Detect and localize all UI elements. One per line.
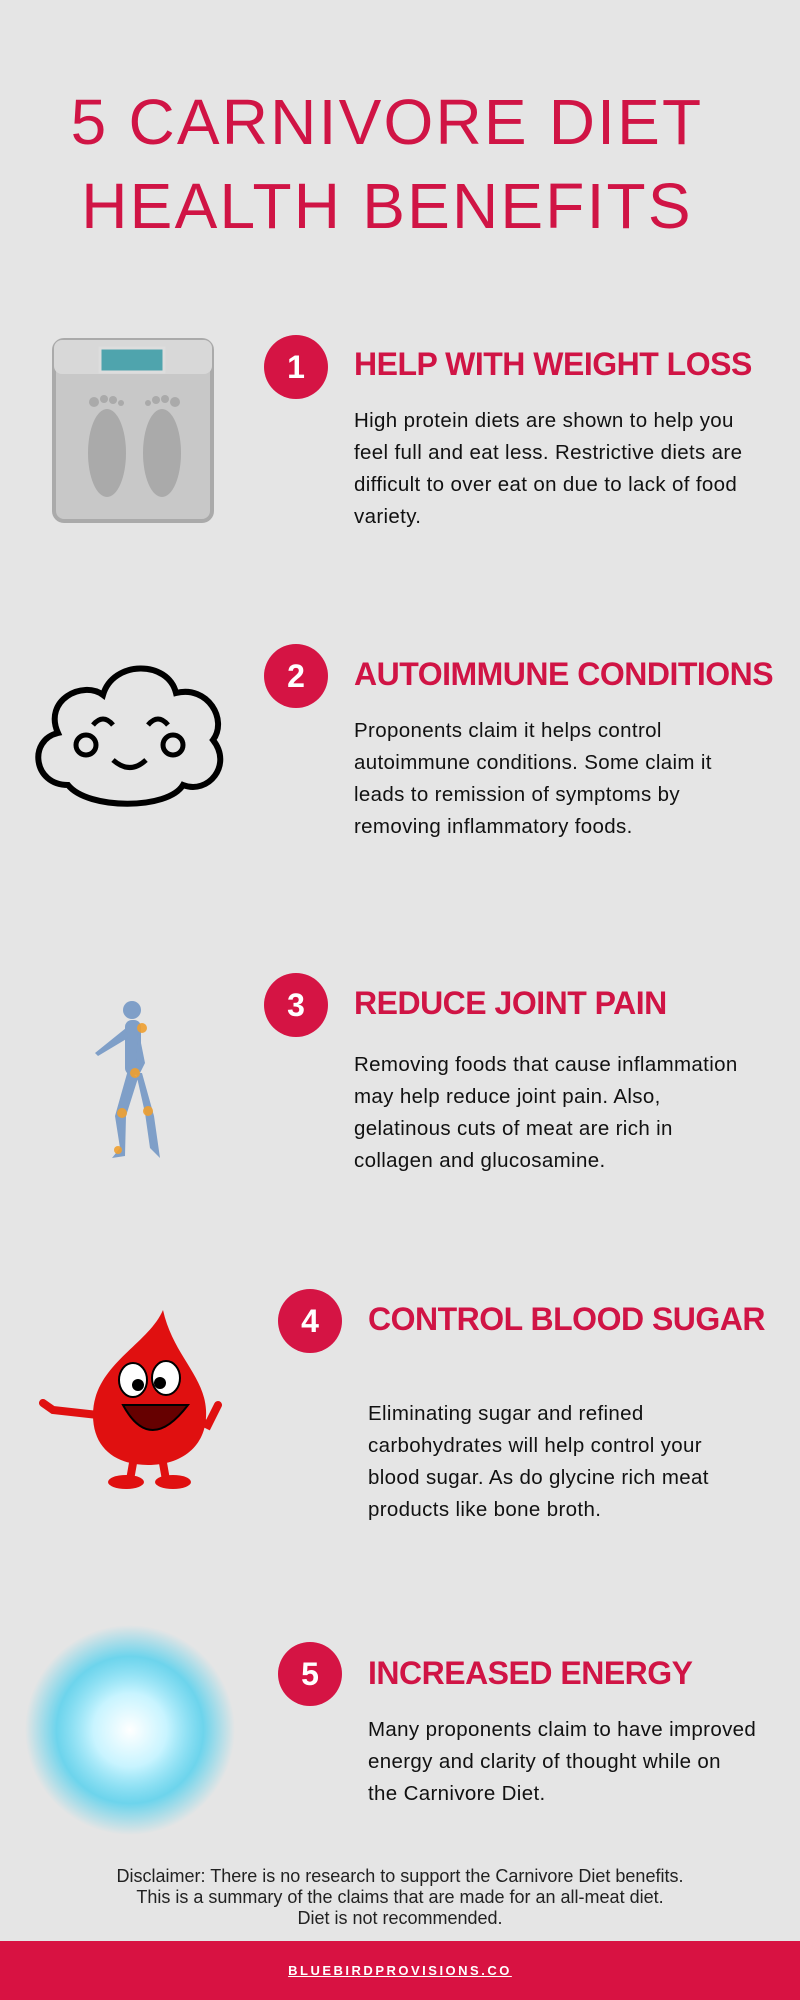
body text: variety. <box>354 505 421 528</box>
number 2 <box>264 644 328 708</box>
footer: BLUEBIRDPROVISIONS.CO <box>288 1963 512 1978</box>
body text: leads to remission of symptoms by <box>354 783 680 806</box>
number 3: 3 <box>287 987 305 1023</box>
panel: autoimmune <box>35 644 773 838</box>
body text: difficult to over eat on due to lack of food <box>354 473 737 496</box>
heading: AUTOIMMUNE CONDITIONS <box>354 656 773 692</box>
body text: gelatinous cuts of meat are rich in <box>354 1117 673 1140</box>
number 5 <box>278 1642 342 1706</box>
disclaimer <box>117 1866 683 1928</box>
body text: collagen and glucosamine. <box>354 1149 606 1172</box>
number 5: 5 <box>301 1656 319 1692</box>
icon: scale <box>52 338 214 523</box>
body text: carbohydrates will help control your <box>368 1434 702 1457</box>
number 4 <box>278 1289 342 1353</box>
panel: energy <box>27 1627 756 1833</box>
body text <box>368 1402 709 1521</box>
body text: may help reduce joint pain. Also, <box>354 1085 661 1108</box>
heading: HELP WITH WEIGHT LOSS <box>354 346 752 382</box>
number 1: 1 <box>287 349 305 385</box>
body text: Removing foods that cause inflammation <box>354 1053 738 1076</box>
body text: blood sugar. As do glycine rich meat <box>368 1466 709 1489</box>
disclaimer: This is a summary of the claims that are made for an all-meat diet. <box>136 1887 664 1907</box>
body text <box>368 1718 756 1805</box>
body text <box>354 719 712 838</box>
body text: Eliminating sugar and refined <box>368 1402 644 1425</box>
body text: feel full and eat less. Restrictive diets are <box>354 441 742 464</box>
number 4: 4 <box>301 1303 319 1339</box>
panel: weight loss <box>52 335 752 528</box>
number 2: 2 <box>287 658 305 694</box>
body text: removing inflammatory foods. <box>354 815 633 838</box>
body text: Proponents claim it helps control <box>354 719 662 742</box>
heading: INCREASED ENERGY <box>368 1655 692 1691</box>
number 1 <box>264 335 328 399</box>
body text: products like bone broth. <box>368 1498 601 1521</box>
icon: human figure <box>95 1001 160 1158</box>
body text: the Carnivore Diet. <box>368 1782 546 1805</box>
panel: joint pain <box>95 973 738 1172</box>
heading: CONTROL BLOOD SUGAR <box>368 1301 765 1337</box>
title: HEALTH BENEFITS <box>81 170 693 242</box>
body text: Many proponents claim to have improved <box>368 1718 756 1741</box>
disclaimer: Disclaimer: There is no research to support the Carnivore Diet benefits. <box>117 1866 683 1886</box>
panel: blood sugar <box>39 1289 765 1521</box>
number 3 <box>264 973 328 1037</box>
body text <box>354 1053 738 1172</box>
disclaimer: Diet is not recommended. <box>297 1908 503 1928</box>
icon: blood drop character <box>39 1310 222 1489</box>
heading: REDUCE JOINT PAIN <box>354 985 667 1021</box>
body text <box>354 409 742 528</box>
footer <box>0 1941 800 2000</box>
title: 5 CARNIVORE DIET <box>71 86 703 158</box>
body text: autoimmune conditions. Some claim it <box>354 751 712 774</box>
body text: High protein diets are shown to help you <box>354 409 734 432</box>
icon: cloud face <box>35 666 224 807</box>
icon: energy burst <box>27 1627 233 1833</box>
title <box>71 86 703 242</box>
body text: energy and clarity of thought while on <box>368 1750 721 1773</box>
